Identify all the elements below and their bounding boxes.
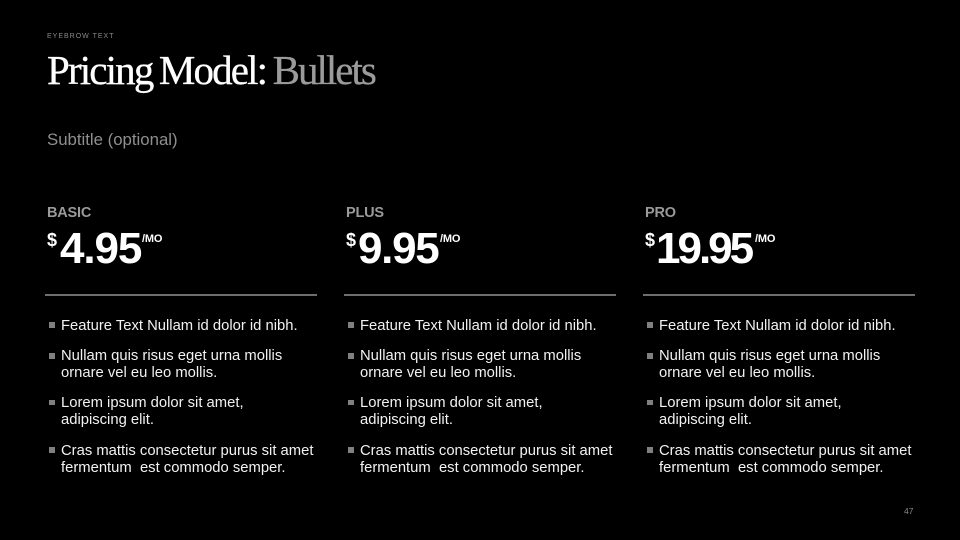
bullet — [647, 447, 652, 452]
panel: pro plan — [643, 205, 915, 476]
plan name: BASIC — [47, 205, 91, 221]
price: 19.95 — [656, 224, 751, 273]
page number: 47 — [904, 506, 913, 516]
bullet — [647, 400, 652, 405]
divider — [45, 294, 317, 296]
plan name: PRO — [645, 205, 676, 221]
feature text: Nullam quis risus eget urna mollis ornare vel eu leo mollis. — [659, 348, 880, 381]
bullet — [348, 322, 354, 328]
bullet — [49, 400, 54, 405]
bullet — [647, 322, 652, 328]
feature text: Lorem ipsum dolor sit amet, adipiscing elit. — [659, 395, 842, 428]
feature text: Cras mattis consectetur purus sit amet fermentum est commodo semper. — [61, 443, 313, 476]
feature text: Feature Text Nullam id dolor id nibh. — [360, 318, 597, 334]
price: 9.95 — [358, 224, 438, 273]
currency sign: $ — [645, 230, 655, 250]
feature text: Feature Text Nullam id dolor id nibh. — [61, 318, 298, 334]
title: Pricing Model: Bullets — [47, 47, 375, 93]
bullet — [348, 353, 354, 358]
divider — [344, 294, 616, 296]
price: 4.95 — [60, 224, 141, 273]
feature text: Cras mattis consectetur purus sit amet fermentum est commodo semper. — [659, 443, 911, 476]
panel: plus plan — [344, 205, 616, 476]
plan name: PLUS — [346, 205, 384, 221]
subtitle: Subtitle (optional) — [47, 130, 178, 149]
feature text: Lorem ipsum dolor sit amet, adipiscing elit. — [360, 395, 543, 428]
bullet — [49, 353, 54, 358]
panel: basic plan — [45, 205, 317, 476]
per month: /MO — [755, 233, 775, 245]
feature text: Feature Text Nullam id dolor id nibh. — [659, 318, 896, 334]
feature text: Cras mattis consectetur purus sit amet fermentum est commodo semper. — [360, 443, 612, 476]
feature text: Lorem ipsum dolor sit amet, adipiscing elit. — [61, 395, 244, 428]
bullet — [348, 400, 354, 405]
bullet — [647, 353, 652, 358]
bullet — [348, 447, 354, 452]
bullet — [49, 322, 54, 328]
feature text: Nullam quis risus eget urna mollis ornare vel eu leo mollis. — [360, 348, 581, 381]
currency sign: $ — [47, 230, 57, 250]
bullet — [49, 447, 54, 452]
feature text: Nullam quis risus eget urna mollis ornare vel eu leo mollis. — [61, 348, 282, 381]
per month: /MO — [142, 233, 162, 245]
per month: /MO — [440, 233, 460, 245]
currency sign: $ — [346, 230, 356, 250]
divider — [643, 294, 915, 296]
eyebrow: EYEBROW TEXT — [47, 33, 114, 40]
